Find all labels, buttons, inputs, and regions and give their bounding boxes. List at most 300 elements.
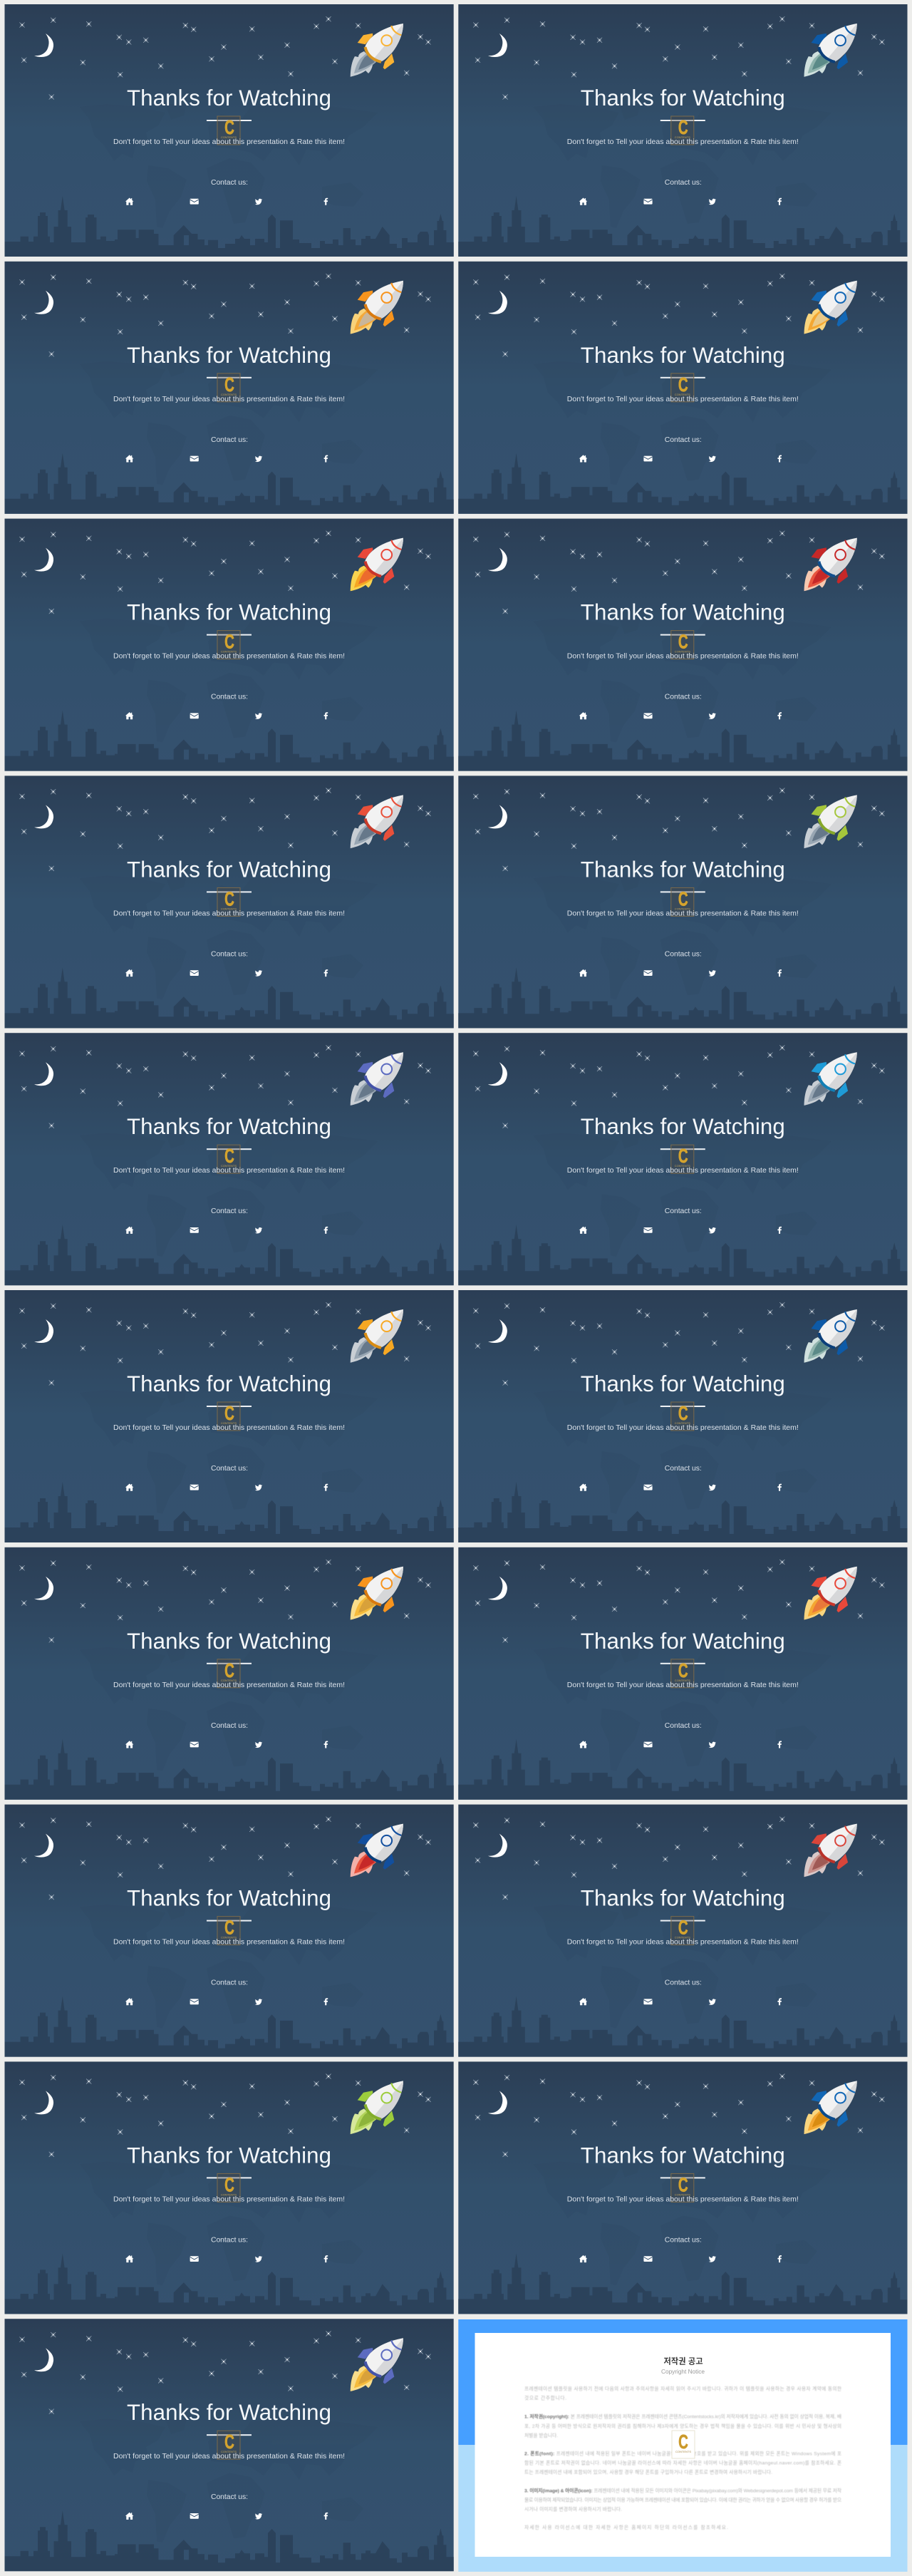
skyline (4, 196, 454, 257)
panel: slide 15 navy rocket red flame (4, 1805, 454, 2057)
stars (19, 274, 431, 356)
panel: slide 11 amber rocket (4, 1290, 454, 1542)
subtitle: Don't forget to Tell your ideas about this presentation & Rate this item! (113, 909, 345, 917)
skyline (458, 711, 908, 771)
watermark: CONTENTS (221, 650, 237, 654)
watermark: C (224, 116, 234, 139)
watermark: C (678, 2431, 688, 2453)
title: Thanks for Watching (127, 86, 331, 110)
subtitle: Don't forget to Tell your ideas about this presentation & Rate this item! (567, 1938, 799, 1947)
watermark: CONTENTS (221, 907, 237, 910)
watermark: CONTENTS (675, 2450, 691, 2453)
slide background (4, 519, 454, 771)
watermark: C (224, 1145, 234, 1168)
notice subheading: Copyright Notice (661, 2368, 705, 2375)
world map (534, 875, 831, 999)
watermark: CONTENTS (675, 1936, 690, 1939)
watermark: C (224, 1659, 234, 1682)
divider (660, 1663, 705, 1664)
contact label: Contact us: (211, 1722, 248, 1730)
divider (207, 891, 252, 892)
watermark (671, 1145, 694, 1173)
world map (534, 1905, 831, 2029)
intro paragraph: 프레젠테이션 템플릿을 사용하기 전에 다음의 사항과 주의사항을 자세히 읽어 주시기 바랍니다. 귀하가 이 템플릿을 사용하는 경우 사용자 계약에 동의한 (524, 2385, 841, 2392)
contact label: Contact us: (211, 1465, 248, 1473)
divider (207, 2177, 252, 2178)
panel: slide 8 green rocket (458, 776, 908, 1028)
icon row (125, 712, 328, 719)
skyline (4, 2253, 454, 2314)
icon row (579, 455, 782, 462)
icon: moon (488, 34, 507, 57)
icon row (579, 1998, 782, 2005)
paragraph: copyright: 포, 2차 가공 등 어떠한 방식으로 원저작자의 권리를 침해하거나 제3자에게 양도하는 경우 법적 책임을 물을 수 있습니다. 이를 위반 시 민사상 및 형사상의 (524, 2423, 841, 2429)
watermark: CONTENTS (675, 135, 690, 139)
stars (473, 2074, 884, 2157)
stars (473, 1045, 884, 1128)
watermark: C (224, 2174, 234, 2196)
icon row (125, 2513, 328, 2520)
title: Thanks for Watching (127, 1114, 331, 1139)
divider (660, 1406, 705, 1407)
skyline (458, 1997, 908, 2057)
slide background (4, 1033, 454, 1285)
watermark: CONTENTS (221, 135, 237, 139)
paragraph: copyright (524, 2413, 841, 2438)
title: Thanks for Watching (581, 1371, 785, 1396)
world map (80, 1133, 378, 1257)
contact label: Contact us: (665, 1979, 702, 1987)
divider (207, 1920, 252, 1922)
title: Thanks for Watching (581, 1886, 785, 1911)
watermark (217, 1917, 240, 1945)
panel: slide 9 purple rocket (4, 1033, 454, 1285)
panel: slide 17 green rocket green flame (4, 2061, 454, 2314)
divider (207, 1663, 252, 1664)
panel: slide 1 yellow rocket (4, 4, 454, 257)
watermark: CONTENTS (675, 393, 690, 396)
world map (534, 1133, 831, 1257)
skyline (4, 1739, 454, 1800)
watermark (671, 631, 694, 659)
watermark (217, 2431, 240, 2459)
world map (80, 104, 378, 228)
title: Thanks for Watching (581, 343, 785, 368)
icon: moon (34, 1319, 53, 1343)
icon: rocket (804, 1309, 857, 1363)
skyline (4, 1997, 454, 2057)
icon: moon (488, 1062, 507, 1086)
contact label: Contact us: (665, 694, 702, 701)
divider (207, 120, 252, 121)
icon: rocket (804, 1824, 857, 1877)
icon: rocket (804, 1567, 857, 1619)
world map (80, 619, 378, 743)
icon row (579, 1484, 782, 1491)
world map (80, 875, 378, 999)
watermark (217, 2173, 240, 2202)
contact label: Contact us: (665, 436, 702, 444)
subtitle: Don't forget to Tell your ideas about this presentation & Rate this item! (113, 1681, 345, 1689)
watermark: C (678, 1402, 688, 1425)
icon row (125, 2255, 328, 2262)
slide background (458, 2061, 908, 2314)
icon row (125, 1998, 328, 2005)
watermark: C (678, 116, 688, 139)
backdrop upper blue (458, 2319, 908, 2445)
world map (80, 2161, 378, 2285)
watermark (217, 1659, 240, 1688)
slide background (4, 2061, 454, 2314)
skyline (4, 1225, 454, 1285)
icon row (125, 455, 328, 462)
slide background (4, 2319, 454, 2571)
stars (473, 1302, 884, 1386)
watermark: CONTENTS (221, 1936, 237, 1939)
stars (19, 1817, 431, 1900)
world map (80, 361, 378, 485)
icon: moon (488, 2091, 507, 2114)
watermark (672, 2431, 695, 2458)
stars (19, 2074, 431, 2157)
stars (19, 2331, 431, 2414)
world map (534, 619, 831, 743)
subtitle: Don't forget to Tell your ideas about this presentation & Rate this item! (567, 2195, 799, 2203)
watermark: C (224, 2431, 234, 2453)
watermark: C (678, 1659, 688, 1682)
stars (19, 1560, 431, 1642)
icon: moon (34, 291, 53, 314)
world map (534, 104, 831, 228)
paragraph: font: 함된 기본 폰트로 저작권이 없습니다. 네이버 나눔글꼴 라이선스에 따라 자세한 사항은 네이버 나눔글꼴 홈페이지(hangeul.naver.com)를 참조하세요. 폰 (524, 2459, 841, 2466)
stars (473, 788, 884, 871)
subtitle: Don't forget to Tell your ideas about this presentation & Rate this item! (113, 1938, 345, 1947)
icon: moon (34, 34, 53, 57)
skyline (4, 1482, 454, 1542)
subtitle: Don't forget to Tell your ideas about this presentation & Rate this item! (113, 138, 345, 146)
subtitle: Don't forget to Tell your ideas about this presentation & Rate this item! (567, 395, 799, 403)
icon row (125, 1227, 328, 1234)
icon: rocket (351, 538, 403, 591)
title: Thanks for Watching (581, 1114, 785, 1139)
divider (207, 634, 252, 636)
title: Thanks for Watching (127, 1629, 331, 1654)
icon: rocket (351, 1567, 403, 1619)
panel: slide 16 red rocket pale flame (458, 1805, 908, 2057)
icon: moon (34, 2091, 53, 2114)
subtitle: Don't forget to Tell your ideas about this presentation & Rate this item! (567, 1166, 799, 1175)
panel: slide 6 dark red rocket red flame (458, 519, 908, 771)
subtitle: Don't forget to Tell your ideas about this presentation & Rate this item! (567, 909, 799, 917)
title: Thanks for Watching (581, 86, 785, 110)
contact label: Contact us: (211, 2236, 248, 2244)
icon: moon (488, 1319, 507, 1343)
panel: slide 7 red rocket gray flame (4, 776, 454, 1028)
watermark: CONTENTS (221, 393, 237, 396)
divider (660, 120, 705, 121)
slide background (4, 776, 454, 1028)
panel: slide 14 red rocket orange flame (458, 1547, 908, 1800)
subtitle: Don't forget to Tell your ideas about this presentation & Rate this item! (113, 2195, 345, 2203)
watermark: CONTENTS (221, 2450, 237, 2453)
stars (19, 531, 431, 614)
watermark: C (224, 1917, 234, 1939)
slide background (458, 776, 908, 1028)
watermark: C (224, 1402, 234, 1425)
watermark (671, 887, 694, 916)
skyline (458, 1739, 908, 1800)
icon row (579, 198, 782, 205)
watermark: C (678, 1917, 688, 1939)
title: Thanks for Watching (127, 1886, 331, 1911)
icon: rocket (804, 281, 857, 334)
slide background (4, 1547, 454, 1800)
paragraph: image and icon (524, 2488, 841, 2512)
contact label: Contact us: (211, 1207, 248, 1215)
world map (80, 1390, 378, 1514)
watermark: CONTENTS (221, 2193, 237, 2196)
watermark (217, 116, 240, 145)
subtitle: Don't forget to Tell your ideas about this presentation & Rate this item! (113, 1423, 345, 1432)
skyline (458, 1482, 908, 1542)
skyline (4, 967, 454, 1028)
divider (660, 377, 705, 378)
stars (19, 1302, 431, 1386)
contact label: Contact us: (665, 179, 702, 187)
watermark: C (678, 1145, 688, 1168)
icon row (579, 1741, 782, 1748)
world map (534, 361, 831, 485)
world map (80, 1647, 378, 1771)
watermark (671, 1917, 694, 1945)
divider (207, 377, 252, 378)
watermark: C (678, 631, 688, 654)
skyline (458, 2253, 908, 2314)
skyline (4, 711, 454, 771)
paragraph: copyright: 1. 저작권(copyright): 본 프레젠테이션 템플릿의 저작권은 프레젠테이션 콘텐츠(Contentstocks.kr)의 저작자에게 있습니다. 사전 동의 없이 상업적 이용, 복제, 배 (524, 2413, 841, 2419)
contact label: Contact us: (665, 950, 702, 958)
divider (660, 634, 705, 636)
contact label: Contact us: (665, 2236, 702, 2244)
icon: moon (488, 805, 507, 828)
watermark: C (678, 888, 688, 910)
watermark (671, 1402, 694, 1431)
slide background (458, 1547, 908, 1800)
icon: rocket (351, 24, 403, 77)
icon: rocket (351, 2081, 403, 2134)
watermark: C (224, 631, 234, 654)
stars (19, 788, 431, 871)
title: Thanks for Watching (127, 600, 331, 625)
watermark: CONTENTS (221, 1421, 237, 1425)
slide background (4, 262, 454, 514)
notice heading: 저작권 공고 (664, 2356, 703, 2366)
watermark: CONTENTS (675, 1679, 690, 1682)
divider (207, 2434, 252, 2436)
divider (660, 1148, 705, 1150)
watermark: CONTENTS (675, 1164, 690, 1168)
icon row (125, 969, 328, 977)
stars (473, 1817, 884, 1900)
slide background (4, 1290, 454, 1542)
world map (534, 1390, 831, 1514)
title: Thanks for Watching (127, 343, 331, 368)
title: Thanks for Watching (127, 2143, 331, 2168)
paragraph: font: 2. 폰트(font): 프레젠테이션 내에 적용된 일부 폰트는 네이버 나눔글꼴의 저작권 보호를 받고 있습니다. 위를 제외한 모든 폰트는 Windows System에 포 (524, 2451, 841, 2456)
slide background (458, 262, 908, 514)
watermark: C (224, 888, 234, 910)
icon: moon (34, 2348, 53, 2371)
watermark (671, 2173, 694, 2202)
subtitle: Don't forget to Tell your ideas about this presentation & Rate this item! (113, 652, 345, 661)
title: Thanks for Watching (581, 1629, 785, 1654)
slide background (458, 1290, 908, 1542)
divider (660, 2177, 705, 2178)
world map (80, 2418, 378, 2542)
icon row (579, 2255, 782, 2262)
icon: rocket (351, 1824, 403, 1877)
slide background (458, 1805, 908, 2057)
skyline (458, 196, 908, 257)
world map (80, 1905, 378, 2029)
panel: copyright notice (458, 2319, 908, 2572)
stars (19, 16, 431, 100)
icon: rocket (804, 1052, 857, 1106)
title: Thanks for Watching (127, 1371, 331, 1396)
slide background (458, 4, 908, 257)
watermark: CONTENTS (675, 650, 690, 654)
watermark (217, 1145, 240, 1173)
title: Thanks for Watching (581, 857, 785, 882)
subtitle: Don't forget to Tell your ideas about this presentation & Rate this item! (113, 1166, 345, 1175)
watermark: C (224, 373, 234, 396)
icon: moon (34, 1577, 53, 1600)
panel: slide 2 navy rocket (458, 4, 908, 257)
paragraph: image and icon: 물로 이용하여 제작되었습니다. 이미지는 상업적 이용 가능하며 프레젠테이션 내에 포함되어 있습니다. 이에 대한 권리는 귀하가 얻을 수 없으며 사용할 경우 허가를 받으 (524, 2496, 841, 2503)
panel: slide 5 red rocket yellow flame (4, 519, 454, 771)
icon: moon (34, 548, 53, 572)
slide background (4, 4, 454, 257)
world map (534, 1647, 831, 1771)
icon row (579, 712, 782, 719)
icon: moon (488, 548, 507, 572)
contact label: Contact us: (211, 436, 248, 444)
skyline (458, 967, 908, 1028)
skyline (458, 453, 908, 514)
skyline (4, 453, 454, 514)
world map (534, 2161, 831, 2285)
icon: moon (488, 1577, 507, 1600)
icon: rocket (351, 795, 403, 848)
subtitle: Don't forget to Tell your ideas about this presentation & Rate this item! (567, 652, 799, 661)
closing line: 자세한 사용 라이선스에 대한 자세한 사항은 홈페이지 하단의 라이선스를 참조하세요. (524, 2524, 728, 2530)
divider (207, 1406, 252, 1407)
icon: rocket (351, 2338, 403, 2391)
paragraph: copyright: 처벌을 받습니다. (524, 2432, 558, 2438)
watermark (217, 1402, 240, 1431)
subtitle: Don't forget to Tell your ideas about this presentation & Rate this item! (113, 395, 345, 403)
icon row (125, 1741, 328, 1748)
contact label: Contact us: (665, 1207, 702, 1215)
slide background (458, 519, 908, 771)
panel: slide 18 blue rocket yellow flame (458, 2061, 908, 2314)
icon: rocket (804, 538, 857, 591)
icon: moon (34, 1834, 53, 1858)
panel: slide 3 orange rocket (4, 262, 454, 514)
watermark (671, 116, 694, 145)
contact label: Contact us: (211, 2493, 248, 2501)
icon: moon (34, 1062, 53, 1086)
panel: slide 12 navy rocket (458, 1290, 908, 1542)
intro paragraph: 것으로 간주합니다. (524, 2395, 566, 2401)
watermark: CONTENTS (675, 1421, 690, 1425)
contact label: Contact us: (211, 1979, 248, 1987)
contact label: Contact us: (211, 179, 248, 187)
backdrop lower light blue (458, 2445, 908, 2572)
icon: moon (488, 291, 507, 314)
icon: moon (488, 1834, 507, 1858)
watermark (217, 373, 240, 402)
icon row (579, 969, 782, 977)
watermark (671, 1659, 694, 1688)
stars (19, 1045, 431, 1128)
icon: rocket (804, 2081, 857, 2134)
subtitle: Don't forget to Tell your ideas about this presentation & Rate this item! (567, 1681, 799, 1689)
contact label: Contact us: (211, 950, 248, 958)
contact label: Contact us: (211, 694, 248, 701)
watermark (671, 373, 694, 402)
contact label: Contact us: (665, 1465, 702, 1473)
icon row (579, 1227, 782, 1234)
slide background (4, 1805, 454, 2057)
icon: moon (34, 805, 53, 828)
subtitle: Don't forget to Tell your ideas about this presentation & Rate this item! (113, 2452, 345, 2461)
contact label: Contact us: (665, 1722, 702, 1730)
subtitle: Don't forget to Tell your ideas about this presentation & Rate this item! (567, 138, 799, 146)
title: Thanks for Watching (581, 2143, 785, 2168)
icon: rocket (351, 281, 403, 334)
stars (473, 274, 884, 356)
skyline (458, 1225, 908, 1285)
icon: rocket (351, 1052, 403, 1106)
watermark (217, 631, 240, 659)
slide background (458, 1033, 908, 1285)
title: Thanks for Watching (127, 857, 331, 882)
watermark: CONTENTS (221, 1164, 237, 1168)
icon: rocket (804, 24, 857, 77)
watermark: C (678, 2174, 688, 2196)
paragraph: image and icon: 시거나 이미지를 변경하여 사용하시기 바랍니다. (524, 2506, 622, 2512)
watermark: CONTENTS (675, 2193, 690, 2196)
watermark: C (678, 373, 688, 396)
divider (660, 1920, 705, 1922)
icon row (125, 198, 328, 205)
icon row (125, 1484, 328, 1491)
subtitle: Don't forget to Tell your ideas about this presentation & Rate this item! (567, 1423, 799, 1432)
panel: slide 4 blue rocket orange flame (458, 262, 908, 514)
title: Thanks for Watching (581, 600, 785, 625)
icon: rocket (351, 1309, 403, 1363)
divider (660, 891, 705, 892)
stars (473, 16, 884, 100)
panel: slide 19 purple rocket yellow flame (4, 2319, 454, 2571)
paragraph: image and icon: 3. 이미지(image) & 아이콘(icon): 프레젠테이션 내에 적용된 모든 이미지와 아이콘은 Pixabay(pixabay.com)와 Webdesignerdepot.com 등에서 제공된 무료 저작 (524, 2488, 841, 2493)
paragraph: font (524, 2451, 841, 2475)
paragraph: font: 트는 프레젠테이션 내에 포함되어 있으며, 사용할 경우 해당 폰트를 구입하거나 다른 폰트로 변경하여 사용하시기 바랍니다. (524, 2469, 772, 2475)
stars (473, 1560, 884, 1642)
watermark: CONTENTS (221, 1679, 237, 1682)
panel: slide 13 orange rocket yellow flame (4, 1547, 454, 1800)
